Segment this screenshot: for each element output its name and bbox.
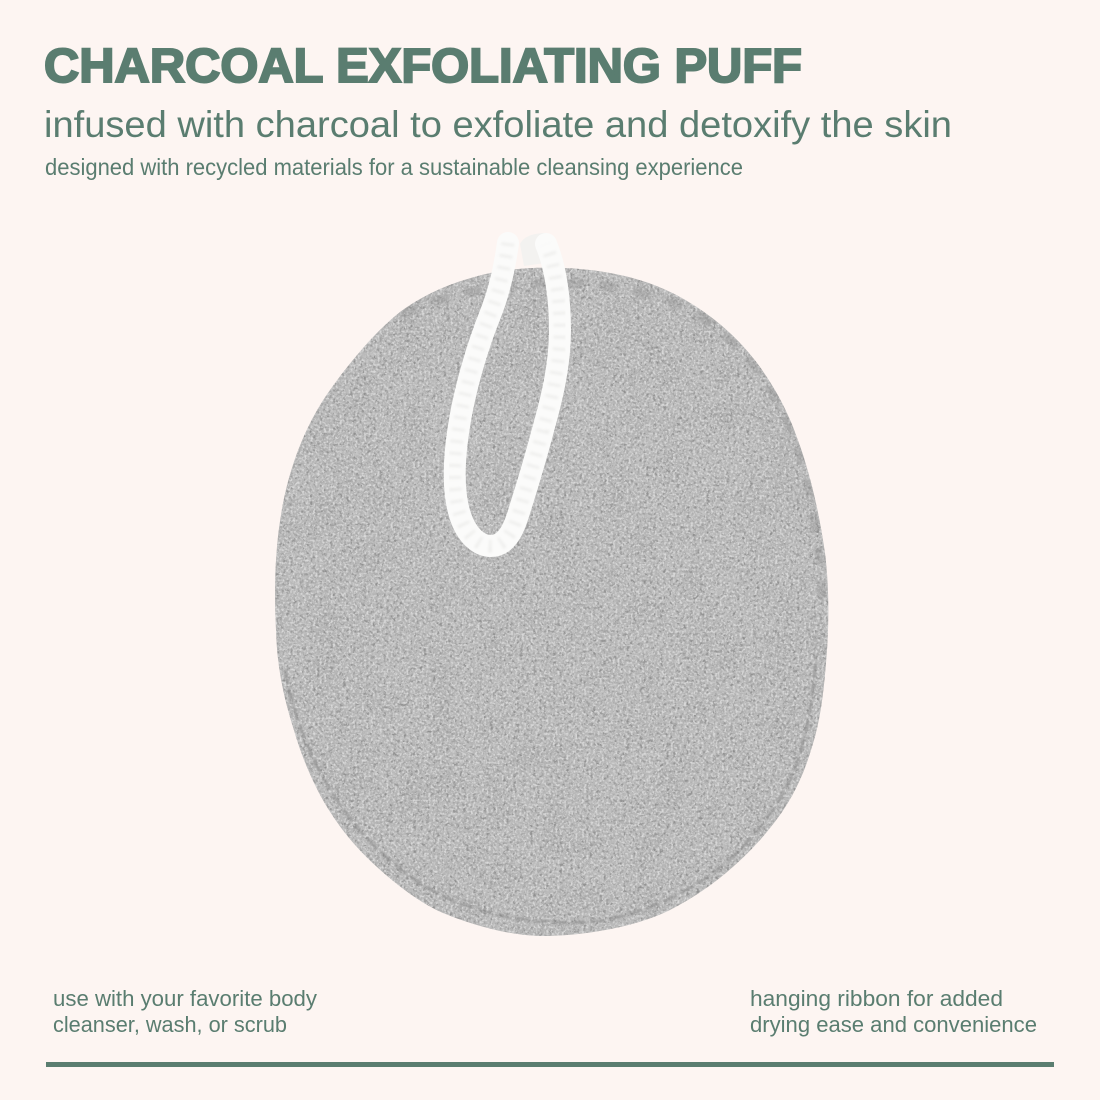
title: CHARCOAL EXFOLIATING PUFF — [44, 40, 802, 93]
tagline: designed with recycled materials for a sustainable cleansing experience — [45, 154, 743, 180]
callout: usage note: use with your favorite body — [53, 986, 317, 1011]
callout: hanging ribbon note: hanging ribbon for added — [750, 986, 1003, 1011]
hanging rope loop — [455, 233, 560, 546]
callout: hanging ribbon note — [750, 986, 1037, 1037]
sponge body — [260, 255, 840, 945]
callout: usage note: cleanser, wash, or scrub — [53, 1012, 287, 1037]
bottom rule — [46, 1062, 1054, 1067]
subtitle: infused with charcoal to exfoliate and detoxify the skin — [44, 104, 952, 145]
product image: charcoal puff — [260, 233, 840, 945]
callout: hanging ribbon note: drying ease and convenience — [750, 1012, 1037, 1037]
callout: usage note — [53, 986, 317, 1037]
